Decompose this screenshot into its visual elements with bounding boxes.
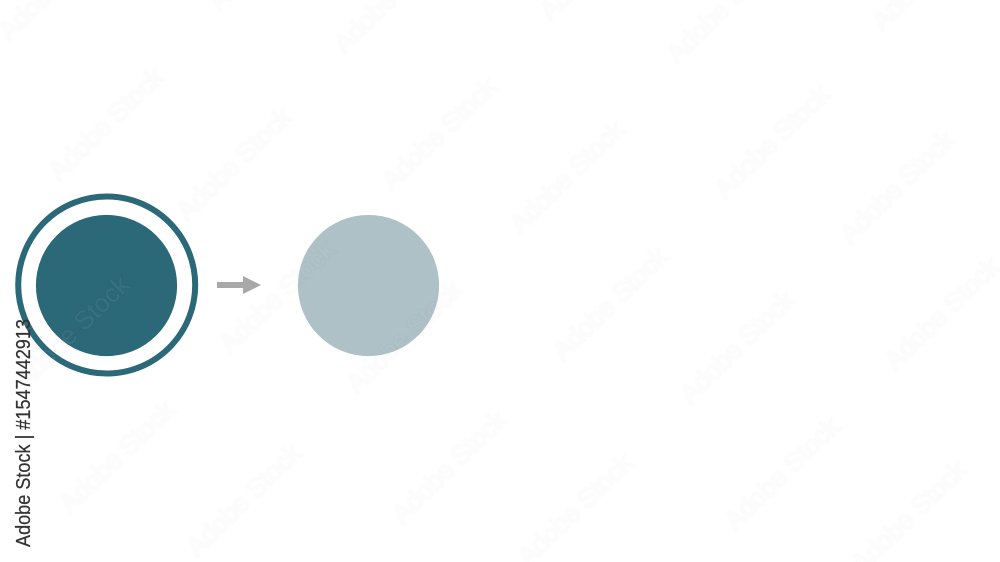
- dark teal filled circle: [36, 215, 177, 356]
- watermark pattern: Adobe Stock: [673, 284, 801, 409]
- watermark pattern: Adobe Stock: [170, 101, 298, 226]
- watermark pattern: Adobe Stock: [385, 404, 513, 529]
- watermark pattern: Adobe Stock: [340, 274, 468, 399]
- watermark pattern: Adobe Stock: [546, 241, 674, 366]
- watermark pattern: Adobe Stock: [708, 79, 836, 204]
- arrow: grey pointing right: [217, 276, 261, 294]
- watermark pattern: Adobe Stock: [213, 234, 341, 359]
- watermark pattern: Adobe Stock: [375, 71, 503, 196]
- light blue-grey filled circle: [298, 215, 439, 356]
- watermark pattern: Adobe Stock: [833, 124, 961, 249]
- watermark pattern: Adobe Stock: [8, 269, 136, 394]
- watermark pattern: Adobe Stock: [718, 411, 846, 536]
- watermark pattern: Adobe Stock: [53, 394, 181, 519]
- watermark pattern: Adobe Stock: [180, 437, 308, 562]
- outer ring: dark teal circle: [18, 196, 195, 374]
- vertical stock credit text: Adobe Stock | #1547442913: [13, 319, 35, 547]
- watermark pattern: Adobe Stock: [503, 114, 631, 239]
- watermark pattern: Adobe Stock: [42, 61, 170, 186]
